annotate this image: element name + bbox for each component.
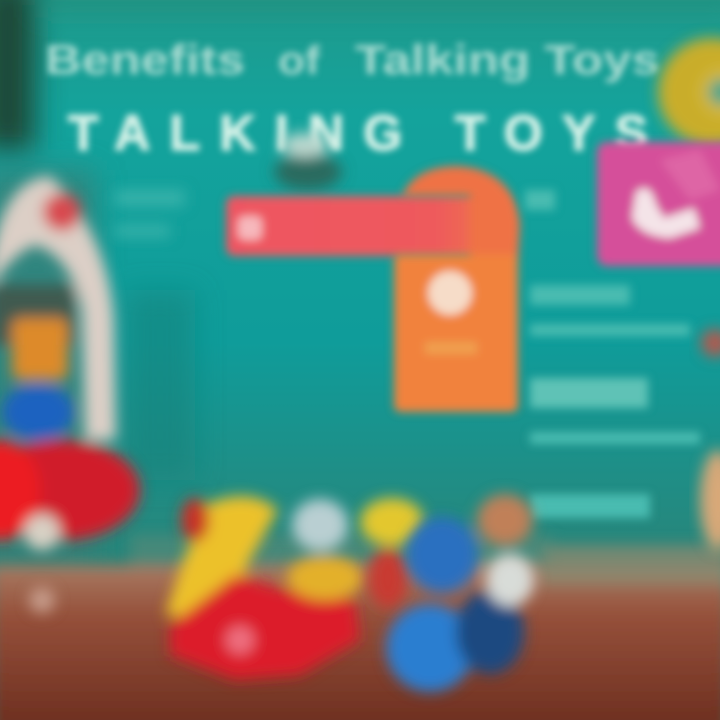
toy: small yellow and red figure — [360, 498, 424, 608]
card text — [425, 342, 477, 354]
text block: left column — [115, 190, 185, 237]
title: line one: Benefits — [45, 36, 245, 83]
title: word of: of — [278, 39, 321, 83]
background: dark left edge — [0, 0, 720, 570]
toy: arch — [0, 176, 140, 613]
title: word talking toys: Talking Toys — [355, 36, 660, 83]
panel: orange card — [394, 166, 520, 412]
icon: white circle — [428, 271, 472, 315]
text block: right column — [525, 190, 700, 518]
icon: bar bullet — [238, 216, 262, 240]
title: line two: TALKING TOYS — [68, 105, 648, 161]
panel: pink card — [597, 142, 720, 266]
icon: dark toy above panel — [274, 133, 342, 190]
toy: blue figure — [386, 494, 534, 692]
toy: yellow and red figure — [165, 496, 363, 680]
badge: yellow circle — [658, 38, 720, 146]
toy: right edge — [700, 329, 720, 550]
background: teal wall — [0, 0, 720, 570]
background: wooden table — [0, 535, 720, 720]
icon: white duck — [632, 188, 700, 238]
panel: red bar — [226, 196, 506, 256]
